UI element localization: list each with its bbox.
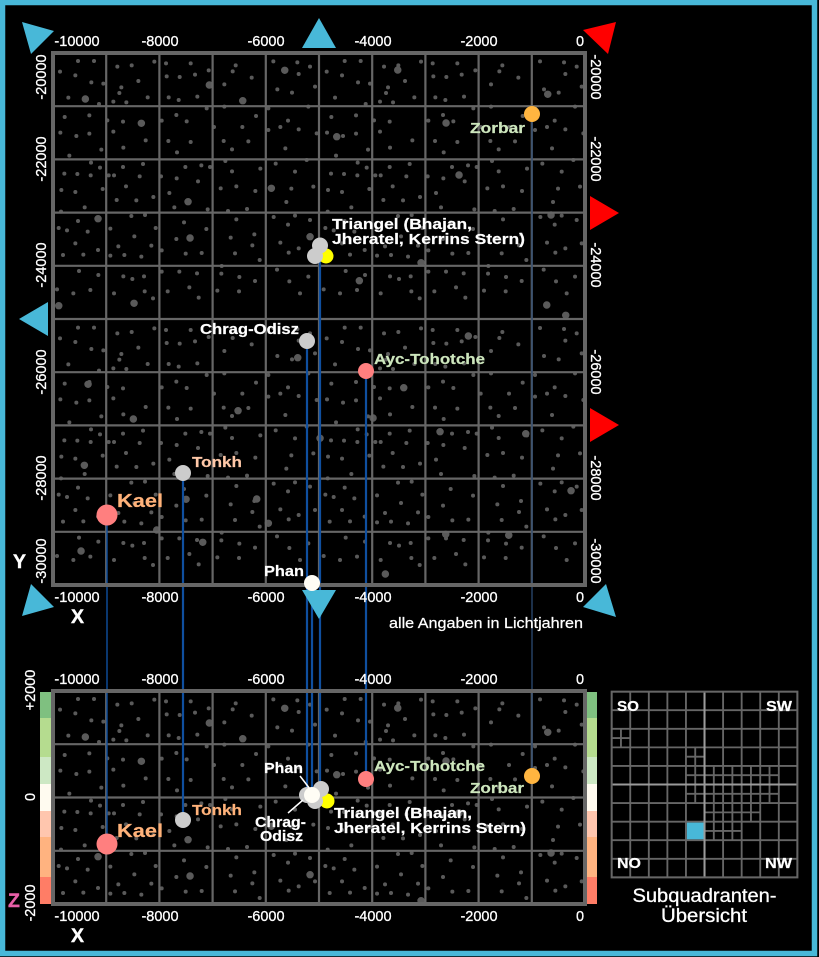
bottom x axis labels of upper map xyxy=(54,590,584,606)
left y axis labels: -26000 xyxy=(34,349,50,395)
marker: Zorbar upper xyxy=(470,106,540,137)
marker: Tonkh upper xyxy=(175,454,242,481)
marker: Zorbar lower xyxy=(470,768,540,797)
marker cluster: Triangel, Chrag-Odisz, Phan lower: Jheratel, Kerrins Stern) xyxy=(334,820,526,837)
panel: XZ star map xyxy=(53,691,585,904)
marker: Tonkh upper: Tonkh xyxy=(192,454,242,471)
marker: Chrag-Odisz upper: Chrag-Odisz xyxy=(200,321,299,338)
marker: Phan upper xyxy=(264,563,320,591)
z axis labels: -2000 xyxy=(23,884,39,922)
top x axis labels of lower map: -6000 xyxy=(247,672,285,688)
z scale right xyxy=(587,692,597,904)
grid lower xyxy=(53,691,585,904)
panel: XY star map xyxy=(53,53,585,585)
bottom x axis labels of lower map: -6000 xyxy=(247,909,285,925)
z axis labels xyxy=(23,670,39,922)
marker cluster: Triangel, Chrag-Odisz, Phan lower: Chrag- xyxy=(255,814,306,831)
marker: Triangel upper: Triangel (Bhajan, xyxy=(332,216,472,233)
overview caption: Übersicht xyxy=(661,906,748,927)
left y axis labels: -30000 xyxy=(34,538,50,584)
right y axis labels: -20000 xyxy=(587,54,603,100)
marker: Phan upper: Phan xyxy=(264,563,304,580)
star field upper xyxy=(57,61,583,574)
marker: Zorbar lower: Zorbar xyxy=(470,780,524,797)
bottom x axis labels of lower map: -8000 xyxy=(141,909,179,925)
right y axis labels: -24000 xyxy=(587,242,603,288)
overview caption xyxy=(632,886,776,927)
quadrant label NW: NW xyxy=(765,855,793,872)
bottom x axis labels of lower map: 0 xyxy=(576,909,584,925)
panel: subquadrant overview xyxy=(612,692,797,927)
z axis labels: +2000 xyxy=(23,670,39,710)
arrow: red right upper xyxy=(590,196,619,230)
marker: Chrag-Odisz upper xyxy=(200,321,315,349)
top x axis labels of lower map: -10000 xyxy=(54,672,100,688)
bottom x axis labels of lower map: -2000 xyxy=(460,909,498,925)
top x axis labels: -10000 xyxy=(54,34,100,50)
top x axis labels: -8000 xyxy=(141,34,179,50)
axis letter Z: Z xyxy=(8,890,20,912)
top x axis labels: -6000 xyxy=(247,34,285,50)
arrow: red top-right xyxy=(583,22,616,54)
left y axis labels xyxy=(34,54,50,584)
marker: Tonkh lower xyxy=(175,802,242,828)
top x axis labels of lower map xyxy=(54,672,584,688)
bottom x axis labels of lower map: -4000 xyxy=(354,909,392,925)
top x axis labels: 0 xyxy=(576,34,584,50)
marker cluster: Triangel, Chrag-Odisz, Phan lower: Phan xyxy=(264,760,303,777)
quadrant label SO: SO xyxy=(617,698,639,715)
bottom x axis labels of upper map: -6000 xyxy=(247,590,285,606)
frame upper map xyxy=(53,53,585,585)
top x axis labels xyxy=(54,34,584,50)
top x axis labels: -4000 xyxy=(354,34,392,50)
marker: Kael upper xyxy=(96,490,163,526)
marker: Ayc-Tohotche lower: Ayc-Tohotche xyxy=(374,758,485,775)
marker cluster: Triangel, Chrag-Odisz, Phan lower xyxy=(255,760,526,845)
marker cluster: Triangel, Chrag-Odisz, Phan lower: Odisz xyxy=(260,828,303,845)
z scale left xyxy=(40,692,51,904)
overview grid xyxy=(612,692,797,877)
marker: Ayc-Tohotche upper xyxy=(358,351,485,379)
left y axis labels: -20000 xyxy=(34,54,50,100)
marker cluster: Triangel, Chrag-Odisz, Phan lower: Triangel (Bhajan, xyxy=(334,805,472,822)
bottom x axis labels of upper map: -8000 xyxy=(141,590,179,606)
quadrant label NO: NO xyxy=(617,855,641,872)
arrow: blue bottom-left xyxy=(22,584,54,616)
marker: Ayc-Tohotche upper: Ayc-Tohotche xyxy=(374,351,485,368)
bottom x axis labels of lower map xyxy=(54,909,584,925)
marker: Tonkh lower: Tonkh xyxy=(192,802,242,819)
grid upper xyxy=(53,53,585,585)
top x axis labels of lower map: -2000 xyxy=(460,672,498,688)
axis letter Y: Y xyxy=(13,551,26,573)
right y axis labels: -22000 xyxy=(587,136,603,182)
axis letter X lower: X xyxy=(71,925,84,947)
top x axis labels of lower map: -8000 xyxy=(141,672,179,688)
marker: Ayc-Tohotche lower xyxy=(358,758,485,787)
arrow: blue top-middle xyxy=(302,18,336,48)
marker: Kael lower: Kael xyxy=(117,820,163,841)
right y axis labels xyxy=(587,54,603,584)
arrow: blue bottom-middle xyxy=(302,590,336,619)
star field lower xyxy=(59,699,583,901)
marker: Kael lower xyxy=(96,820,163,854)
bottom x axis labels of upper map: -2000 xyxy=(460,590,498,606)
marker: Zorbar upper: Zorbar xyxy=(470,120,525,137)
marker: Triangel upper xyxy=(307,216,525,264)
top x axis labels of lower map: -4000 xyxy=(354,672,392,688)
note: units: alle Angaben in Lichtjahren xyxy=(389,615,583,632)
top x axis labels: -2000 xyxy=(460,34,498,50)
arrow: blue left xyxy=(19,302,48,336)
right y axis labels: -26000 xyxy=(587,349,603,395)
left y axis labels: -28000 xyxy=(34,455,50,501)
bottom x axis labels of lower map: -10000 xyxy=(54,909,100,925)
projection lines xyxy=(107,114,532,844)
left y axis labels: -22000 xyxy=(34,136,50,182)
z axis labels: 0 xyxy=(23,793,39,801)
marker: Kael upper: Kael xyxy=(117,490,163,511)
arrow: blue top-left xyxy=(22,22,54,54)
bottom x axis labels of upper map: 0 xyxy=(576,590,584,606)
left y axis labels: -24000 xyxy=(34,242,50,288)
right y axis labels: -28000 xyxy=(587,455,603,501)
top x axis labels of lower map: 0 xyxy=(576,672,584,688)
bottom x axis labels of upper map: -4000 xyxy=(354,590,392,606)
right y axis labels: -30000 xyxy=(587,538,603,584)
overview caption: Subquadranten- xyxy=(632,886,776,907)
arrow: red right lower xyxy=(590,408,619,442)
axis letter X upper: X xyxy=(71,606,84,628)
quadrant label SW: SW xyxy=(766,698,793,715)
bottom x axis labels of upper map: -10000 xyxy=(54,590,100,606)
marker: Triangel upper: Jheratel, Kerrins Stern) xyxy=(332,231,525,248)
arrow: blue bottom-right xyxy=(583,584,616,617)
frame lower map xyxy=(53,691,585,904)
